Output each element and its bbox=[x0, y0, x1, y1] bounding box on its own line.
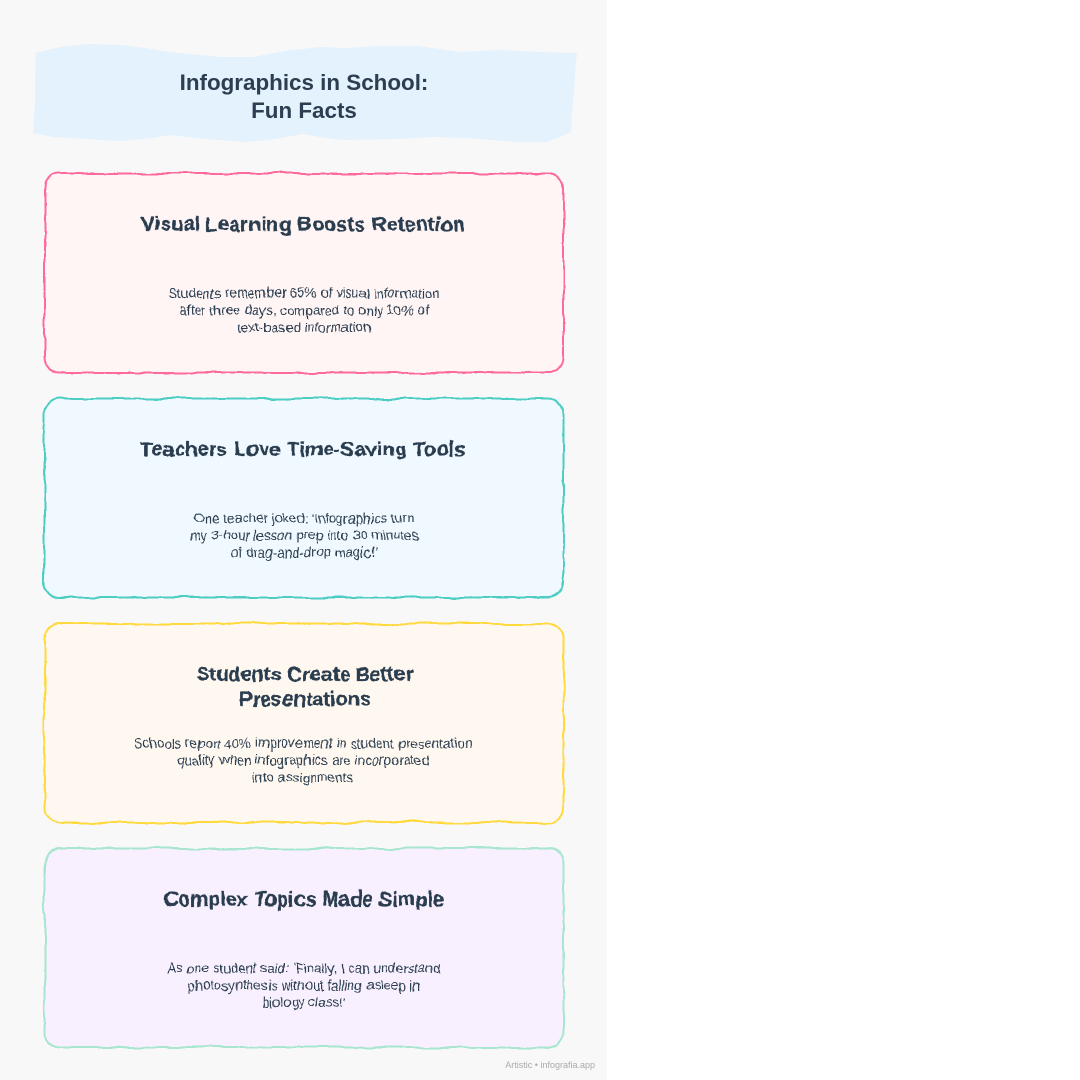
card heading: Presentations bbox=[239, 689, 371, 711]
card body text: into assignments bbox=[253, 770, 354, 785]
card frame bbox=[44, 848, 564, 1048]
panel: students bbox=[44, 624, 564, 822]
card body text: my 3-hour lesson prep into 30 minutes bbox=[190, 528, 419, 543]
title banner bbox=[33, 44, 577, 142]
card frame bbox=[44, 174, 564, 372]
card body text: quality when infographics are incorporated bbox=[177, 753, 429, 768]
card frame bbox=[44, 398, 564, 598]
card body text: after three days, compared to only 10% of bbox=[179, 303, 429, 318]
card body text: photosynthesis without falling asleep in bbox=[188, 978, 420, 993]
title: Infographics in School: bbox=[180, 70, 428, 95]
panel: complex topics bbox=[44, 848, 564, 1048]
card body text: Schools report 40% improvement in student presentation bbox=[134, 736, 472, 751]
card body text: One teacher joked: 'Infographics turn bbox=[194, 511, 414, 526]
card heading: Complex Topics Made Simple bbox=[164, 889, 444, 911]
card heading: Visual Learning Boosts Retention bbox=[140, 214, 466, 236]
footer credit: Artistic • infografia.app bbox=[505, 1060, 595, 1070]
left page background bbox=[0, 0, 607, 1080]
card body text: text-based information bbox=[238, 320, 370, 335]
card body text: of drag-and-drop magic!' bbox=[231, 545, 377, 560]
card body text: Students remember 65% of visual information bbox=[168, 286, 440, 301]
card frame bbox=[44, 624, 564, 822]
card body text: biology class!' bbox=[262, 995, 346, 1010]
card heading: Students Create Better bbox=[197, 664, 413, 686]
banner background bbox=[33, 44, 577, 142]
panel: visual learning bbox=[44, 174, 564, 372]
card heading: Teachers Love Time-Saving Tools bbox=[140, 439, 466, 461]
card body text: As one student said: 'Finally, I can understand bbox=[167, 961, 441, 976]
title: Fun Facts bbox=[251, 98, 357, 123]
panel: teachers bbox=[44, 398, 564, 598]
